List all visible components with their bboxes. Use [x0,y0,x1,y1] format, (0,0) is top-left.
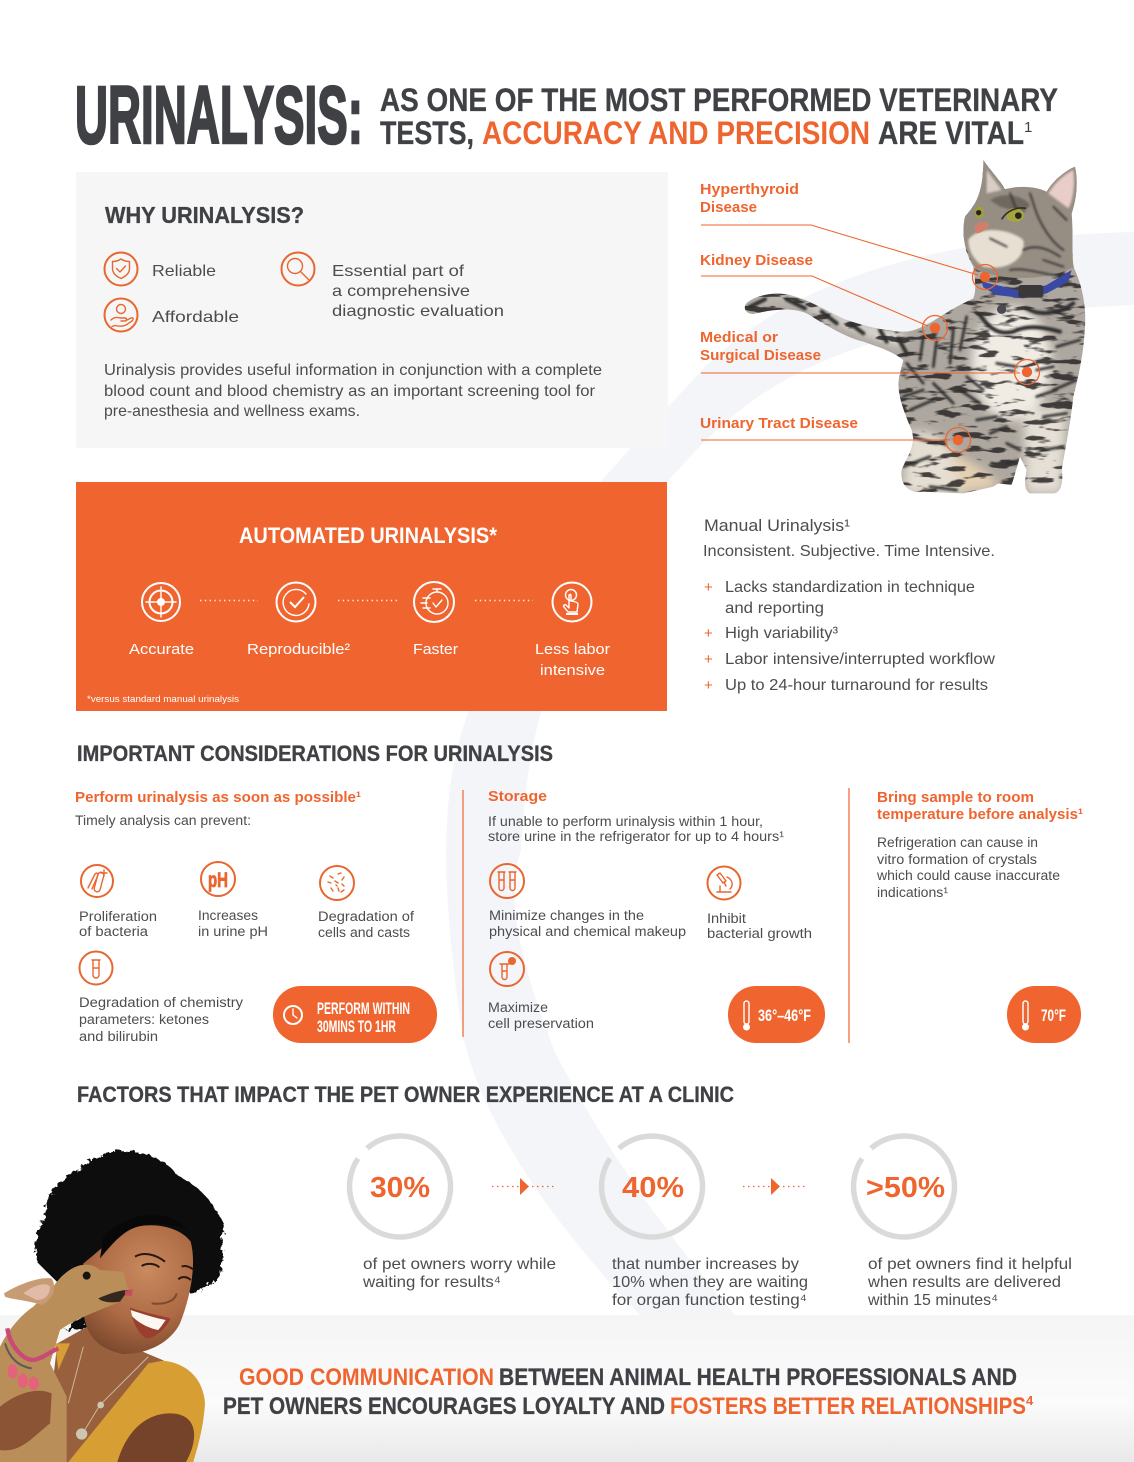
icon: touch hand [552,582,592,622]
arrow: 30 to 40 [492,1178,555,1195]
label: increases pH: Increases [198,908,258,923]
callout: medical or surgical: Medical or [700,329,778,346]
label: minimize changes: Minimize changes in the [489,908,644,923]
closing statement: BETWEEN ANIMAL HEALTH PROFESSIONALS AND [499,1364,1017,1391]
stat: 40%: 10% when they are waiting [612,1274,808,1291]
label: degradation chemistry [79,995,243,1044]
smile [130,1307,171,1339]
label: inhibit growth [707,911,812,941]
title [75,70,1058,161]
label: proliferation: Proliferation [79,909,157,924]
dotted connectors [200,600,533,602]
column intro [488,814,785,844]
column heading: Bring sample to room [877,789,1034,806]
list: + [704,651,713,668]
icon: coin over hand [104,298,138,332]
callout: urinary tract [700,415,970,452]
stat: 30%: of pet owners worry while [363,1256,556,1273]
icon: two test tubes [490,864,524,898]
callout: hyperthyroid [700,181,998,290]
column: room temperature [876,789,1083,1043]
closing statement: 4 [1026,1393,1034,1408]
text: description: pre-anesthesia and wellness exams. [104,403,360,420]
text: essential part: Essential part of [332,263,465,280]
heading: factors: FACTORS THAT IMPACT THE PET OWNER EXPERIENCE AT A CLINIC [77,1082,734,1107]
label: maximize preservation: cell preservation [488,1016,594,1031]
closing statement: GOOD COMMUNICATION [239,1364,494,1391]
callout: medical or surgical: Surgical Disease [700,347,821,364]
pill: perform within: 30MINS TO 1HR [317,1017,396,1036]
closing statement: FOSTERS BETTER RELATIONSHIPS [670,1393,1026,1420]
column intro: If unable to perform urinalysis within 1 hour, [488,814,763,829]
shirt [68,1361,205,1462]
column intro: Timely analysis can prevent: [75,813,251,828]
list: Lacks standardization in technique [725,579,975,596]
subheading: Inconsistent. Subjective. Time Intensive. [703,543,995,560]
panel: why urinalysis [76,172,668,448]
column heading [877,789,1083,823]
label: increases pH: in urine pH [198,924,268,939]
stat: >50% [854,1136,1072,1309]
text: description [104,362,602,420]
icon: bacteria [81,865,113,897]
label: proliferation: of bacteria [79,924,149,939]
face [83,1225,193,1354]
dog [0,1265,128,1462]
cat stripes [750,299,1080,490]
stat: 40% [602,1136,808,1309]
label: maximize preservation [488,1000,594,1031]
column body: which could cause inaccurate [876,868,1060,883]
label: degradation cells [318,909,414,940]
neck and chest [43,1327,164,1462]
list: and reporting [725,600,824,617]
heading: manual urinalysis: Manual Urinalysis¹ [704,516,850,535]
hand [0,1391,52,1450]
label: minimize changes [489,908,686,939]
title: URINALYSIS: URINALYSIS: [75,70,363,161]
list: + [704,677,713,694]
stat: 40%: for organ function testing⁴ [612,1292,807,1309]
icon: target [142,583,180,621]
callouts: diseases [700,181,1040,452]
column heading: Storage [488,788,547,805]
subtitle line 2 [380,115,1032,151]
icon: stopwatch [414,582,454,622]
arrow: 40 to 50 [743,1178,806,1195]
icon: microscope [708,866,740,900]
pill: room temperature: 70°F [1041,1006,1066,1025]
label: minimize changes: physical and chemical makeup [489,924,686,939]
heading: important considerations: IMPORTANT CONSIDERATIONS FOR URINALYSIS [77,741,553,766]
list: + [704,625,713,642]
text: description: Urinalysis provides useful information in conjunction with a complete [104,362,602,379]
label: degradation cells: cells and casts [318,925,410,940]
subtitle line 2: ACCURACY AND PRECISION [482,115,870,151]
label: degradation chemistry: parameters: ketones [79,1012,209,1027]
list: + [704,579,713,596]
stat: 30% [350,1136,556,1291]
pill: fridge temperature [728,986,825,1043]
label: less labor intensive: intensive [540,662,605,679]
photo: woman and dog [0,1151,224,1462]
column: perform as soon as possible [75,789,437,1044]
icon: magnifying glass [282,252,314,286]
callout: kidney: Kidney Disease [700,252,813,269]
stat: >50%: when results are delivered [867,1274,1061,1291]
closing statement: PET OWNERS ENCOURAGES LOYALTY AND [223,1393,665,1420]
stat: 40%: 40% [622,1172,684,1204]
panel: manual urinalysis [703,516,995,694]
eyes and brows [135,1254,194,1280]
label: reproducible: Reproducible² [247,641,350,658]
pill: perform within: PERFORM WITHIN [317,999,410,1018]
column intro: store urine in the refrigerator for up to 4 hours¹ [488,829,785,844]
closing statement [223,1364,1034,1420]
stat: 30%: waiting for results⁴ [362,1274,501,1291]
footnote: *versus standard manual urinalysis [87,694,239,705]
subtitle line 2: ARE VITAL [878,115,1024,151]
cat head [964,160,1077,278]
text: essential part: a comprehensive [332,283,470,300]
icon: test tube [80,952,112,984]
label: affordable: Affordable [152,309,239,326]
callout: hyperthyroid: Hyperthyroid [700,181,799,198]
stat: >50%: within 15 minutes⁴ [867,1292,998,1309]
icon: shield [104,252,138,286]
pill: room temperature [1007,986,1081,1043]
label: accurate: Accurate [129,641,194,658]
photo: cat [740,157,1090,497]
dog collar [7,1328,58,1360]
column heading: temperature before analysis¹ [877,806,1083,823]
column body: vitro formation of crystals [877,852,1037,867]
pill: fridge temperature: 36°–46°F [758,1006,811,1025]
subtitle line 2: 1 [1024,119,1032,136]
list: Up to 24-hour turnaround for results [725,677,988,694]
callout: medical or surgical [700,329,1040,384]
icon: tube with check [490,952,524,986]
list: Labor intensive/interrupted workflow [725,651,995,668]
label: degradation chemistry: and bilirubin [79,1029,158,1044]
callout: hyperthyroid: Disease [700,199,757,216]
label: reliable: Reliable [152,263,216,280]
label: faster: Faster [413,641,458,658]
label: proliferation [79,909,157,939]
heading: why urinalysis: WHY URINALYSIS? [105,202,304,228]
label: inhibit growth: Inhibit [707,911,746,926]
stat: >50%: >50% [866,1172,945,1204]
list: High variability³ [725,625,839,642]
pill: perform within [273,986,437,1043]
text: description: blood count and blood chemistry as an important screening tool for [104,383,596,400]
list [704,579,995,694]
icon: check loop [276,582,316,622]
column heading: Perform urinalysis as soon as possible¹ [75,789,361,806]
icon: cells [320,866,354,900]
icon: pH [201,862,235,896]
label: increases pH [198,908,268,939]
arm [117,1413,194,1462]
stat: 30%: 30% [370,1172,430,1204]
column body: indications¹ [877,885,949,900]
column body: Refrigeration can cause in [877,835,1038,850]
stat: 40%: that number increases by [612,1256,799,1273]
text: essential part: diagnostic evaluation [332,303,504,320]
subtitle line 2: TESTS, [380,115,474,151]
heading: automated urinalysis: AUTOMATED URINALYSIS* [239,523,497,548]
label: less labor intensive [535,641,610,679]
column body [876,835,1060,900]
label: inhibit growth: bacterial growth [707,926,812,941]
label: degradation cells: Degradation of [318,909,414,924]
text: essential part [332,263,504,320]
label: maximize preservation: Maximize [488,1000,548,1015]
necklace [68,1347,148,1435]
callout: kidney [700,252,948,340]
label: degradation chemistry: Degradation of chemistry [79,995,243,1010]
hair [35,1151,224,1330]
bottom band [0,1315,1134,1462]
label: less labor intensive: Less labor [535,641,610,658]
column: storage [488,788,825,1043]
panel: automated urinalysis [76,482,667,711]
icon: pH: pH [208,869,228,892]
stat: >50%: of pet owners find it helpful [868,1256,1072,1273]
cat collar [982,270,1072,314]
callout: urinary tract: Urinary Tract Disease [700,415,858,432]
